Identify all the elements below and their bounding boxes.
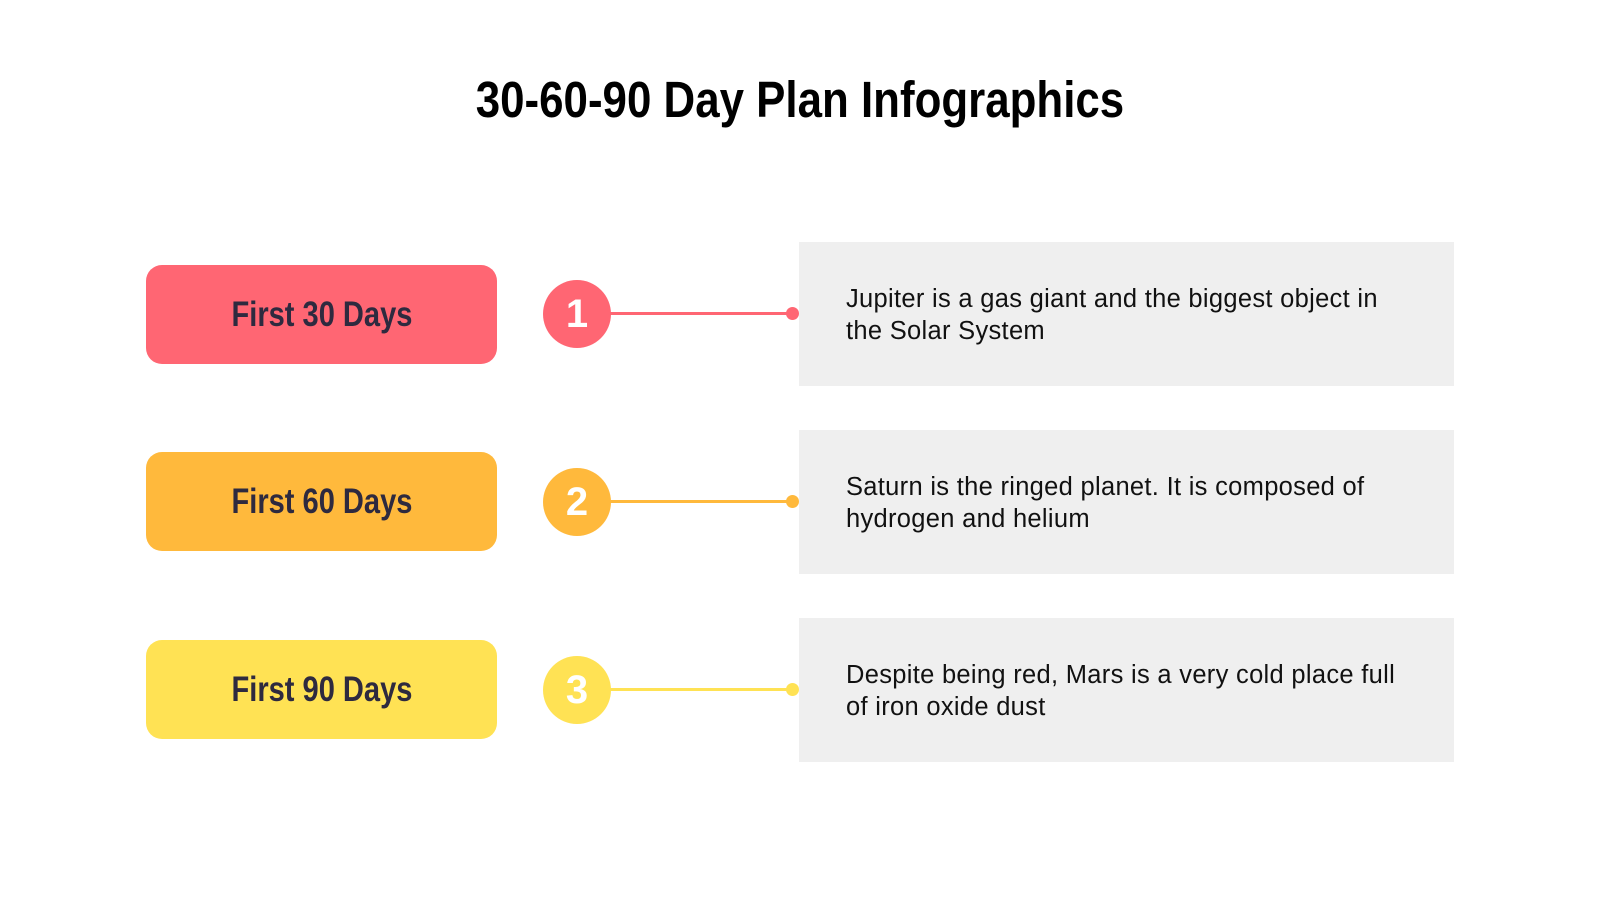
label: first 60 days: First 60 Days <box>231 482 412 520</box>
panel 1 text: Jupiter is a gas giant and the biggest object in the Solar System <box>846 285 1378 345</box>
label: first 30 days: First 30 Days <box>231 294 412 334</box>
panel 3 text: Despite being red, Mars is a very cold place full of iron oxide dust <box>846 661 1395 721</box>
circle number 2: 2 <box>566 480 588 524</box>
label: first 90 days <box>146 640 497 739</box>
circle number 1 <box>543 280 611 348</box>
dot 2 <box>786 495 799 508</box>
row 2 <box>146 430 1454 574</box>
title: 30-60-90 Day Plan Infographics <box>476 71 1124 128</box>
connector 1 <box>600 312 792 315</box>
row 3 <box>146 618 1454 762</box>
circle number 2 <box>543 468 611 536</box>
circle number 3: 3 <box>566 668 588 712</box>
circle number 3 <box>543 656 611 724</box>
label: first 90 days: First 90 Days <box>231 670 412 708</box>
label: first 30 days <box>146 265 497 364</box>
dot 1 <box>786 307 799 320</box>
circle number 1: 1 <box>566 292 588 336</box>
panel 1 text <box>799 242 1454 386</box>
panel 2 text <box>799 430 1454 574</box>
dot 3 <box>786 683 799 696</box>
label: first 60 days <box>146 452 497 551</box>
connector 2 <box>600 500 792 503</box>
panel 2 text: Saturn is the ringed planet. It is composed of hydrogen and helium <box>846 473 1364 533</box>
panel 3 text <box>799 618 1454 762</box>
connector 3 <box>600 688 792 691</box>
row 1 <box>146 242 1454 386</box>
